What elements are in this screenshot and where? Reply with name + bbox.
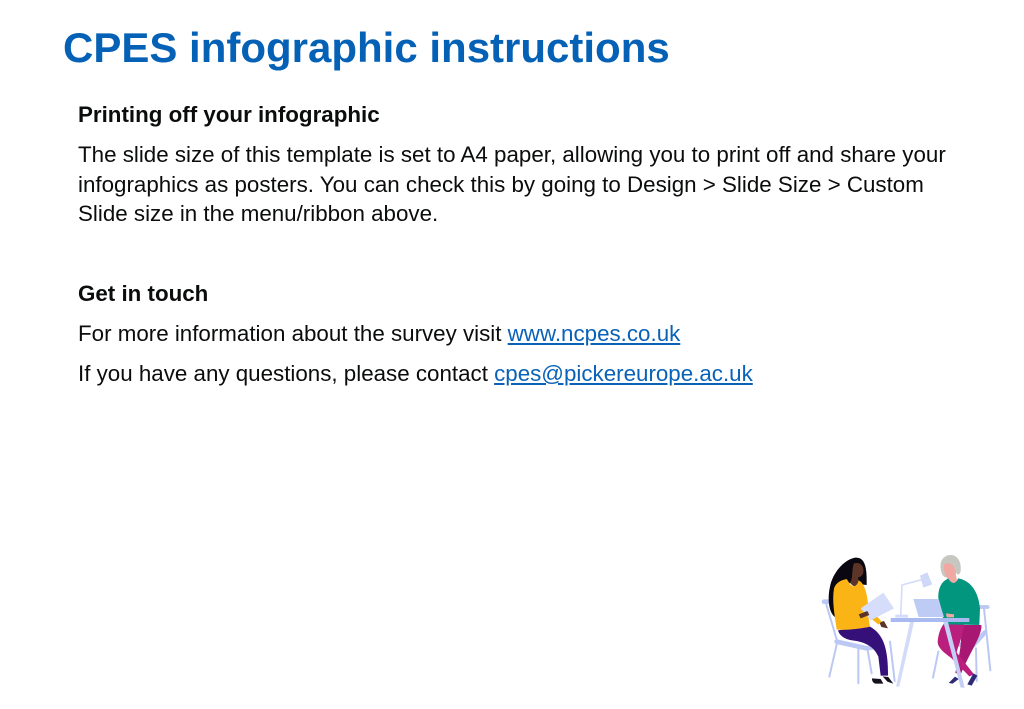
face and neck	[944, 563, 957, 584]
shoes	[949, 677, 959, 684]
far leg	[955, 625, 981, 674]
hand on document	[859, 611, 869, 618]
figure: woman on the left	[829, 558, 894, 684]
sweater	[938, 578, 980, 625]
icon: left chair	[824, 602, 895, 683]
text block: printing instructions: The slide size of this template is set to A4 paper, allowing you to print off and share your	[78, 142, 946, 167]
hair	[829, 558, 867, 618]
heading: printing off your infographic: Printing off your infographic	[78, 102, 380, 127]
icon: laptop	[913, 599, 944, 617]
figure: woman on the right	[938, 555, 981, 686]
illustration: two people at a desk	[822, 555, 992, 688]
sweater	[833, 579, 882, 630]
icon: desk lamp	[895, 572, 932, 618]
icon: desk	[891, 618, 969, 688]
face and neck	[850, 563, 863, 586]
title: CPES infographic instructions	[63, 24, 670, 71]
text block: survey website: For more information about the survey visit www.ncpes.co.uk	[78, 321, 680, 346]
text block: printing instructions: infographics as posters. You can check this by going to Design > Slide Size > Custom	[78, 172, 924, 196]
hair	[940, 555, 961, 577]
near leg	[938, 624, 974, 676]
hand	[946, 613, 954, 617]
trousers	[838, 627, 888, 676]
heading: get in touch: Get in touch	[78, 281, 208, 306]
text block: printing instructions	[78, 142, 946, 226]
document	[861, 593, 894, 620]
text block: printing instructions: Slide size in the menu/ribbon above.	[78, 201, 438, 226]
icon: right chair	[933, 607, 990, 681]
text block: contact email: If you have any questions, please contact cpes@pickereurope.ac.uk	[78, 361, 753, 386]
hand	[879, 621, 888, 628]
